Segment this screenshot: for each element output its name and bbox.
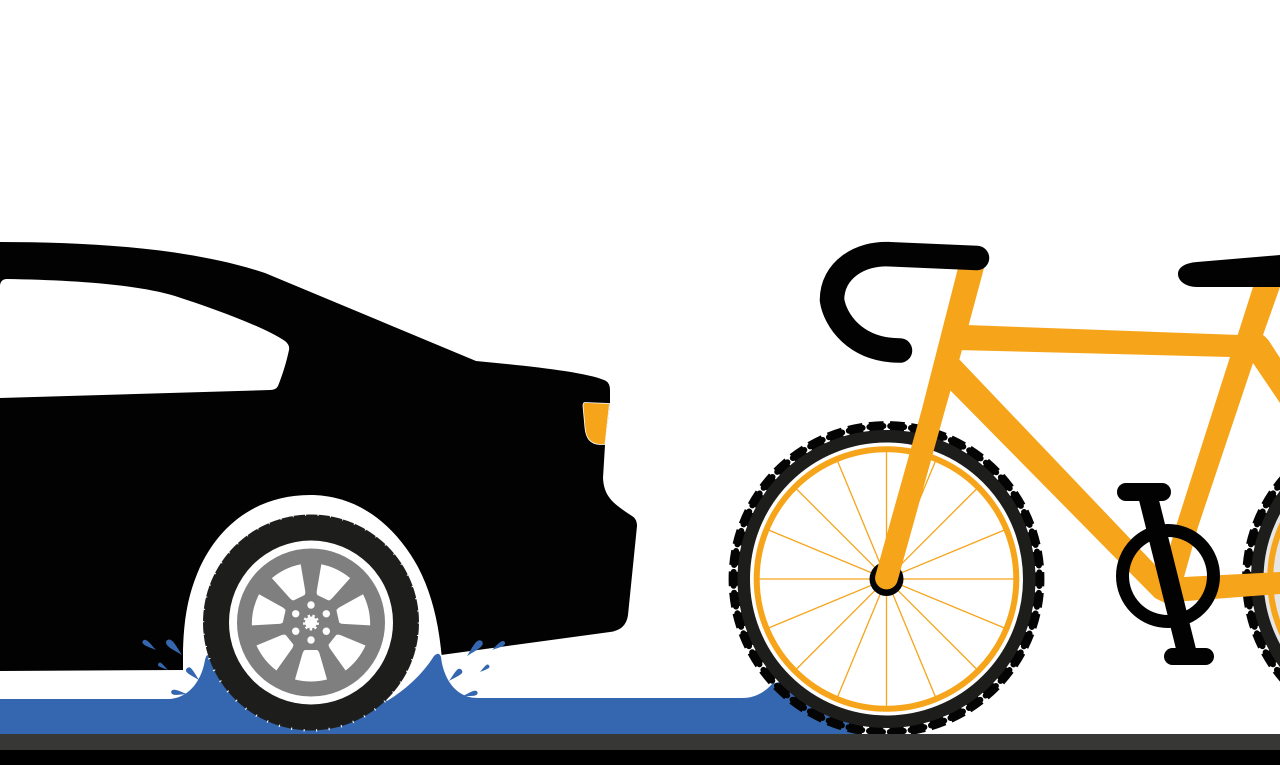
ground [0, 734, 1280, 765]
tyre tread notches [203, 514, 419, 730]
puddle of water [0, 640, 886, 734]
car rear window [0, 279, 289, 398]
bicycle frame [875, 268, 1280, 603]
lower pedal [1164, 648, 1214, 665]
front bicycle wheel [734, 426, 1040, 732]
front rim [757, 449, 1016, 709]
wheel arch [183, 495, 442, 700]
rear tyre [1257, 436, 1280, 722]
front tyre tread [734, 426, 1040, 732]
seven alloy openings [250, 562, 372, 682]
saddle [1178, 255, 1280, 287]
fork and head tube [875, 268, 984, 589]
car tyre [203, 514, 419, 730]
front hub [870, 562, 904, 596]
white rim band [229, 540, 393, 704]
upper pedal [1117, 483, 1171, 501]
chainring [1122, 530, 1214, 622]
centre cap [304, 616, 318, 629]
spokes [758, 451, 1014, 707]
handlebar [832, 254, 977, 350]
wheel bolts [292, 601, 330, 644]
white gap below car body [0, 671, 183, 701]
car body [0, 242, 637, 700]
front tyre [744, 436, 1029, 722]
rear triangle and chainstay [1155, 287, 1280, 602]
grey alloy hub [237, 548, 385, 696]
car wheel [203, 514, 419, 730]
water droplets [141, 638, 506, 698]
crankset [1117, 483, 1214, 665]
top tube [956, 325, 1260, 357]
down tube [945, 357, 1176, 603]
crank arm [1137, 492, 1198, 657]
rear bicycle wheel [1247, 426, 1280, 732]
rear tyre tread [1247, 426, 1280, 732]
rear rim [1270, 449, 1280, 709]
car tail light [583, 402, 610, 444]
